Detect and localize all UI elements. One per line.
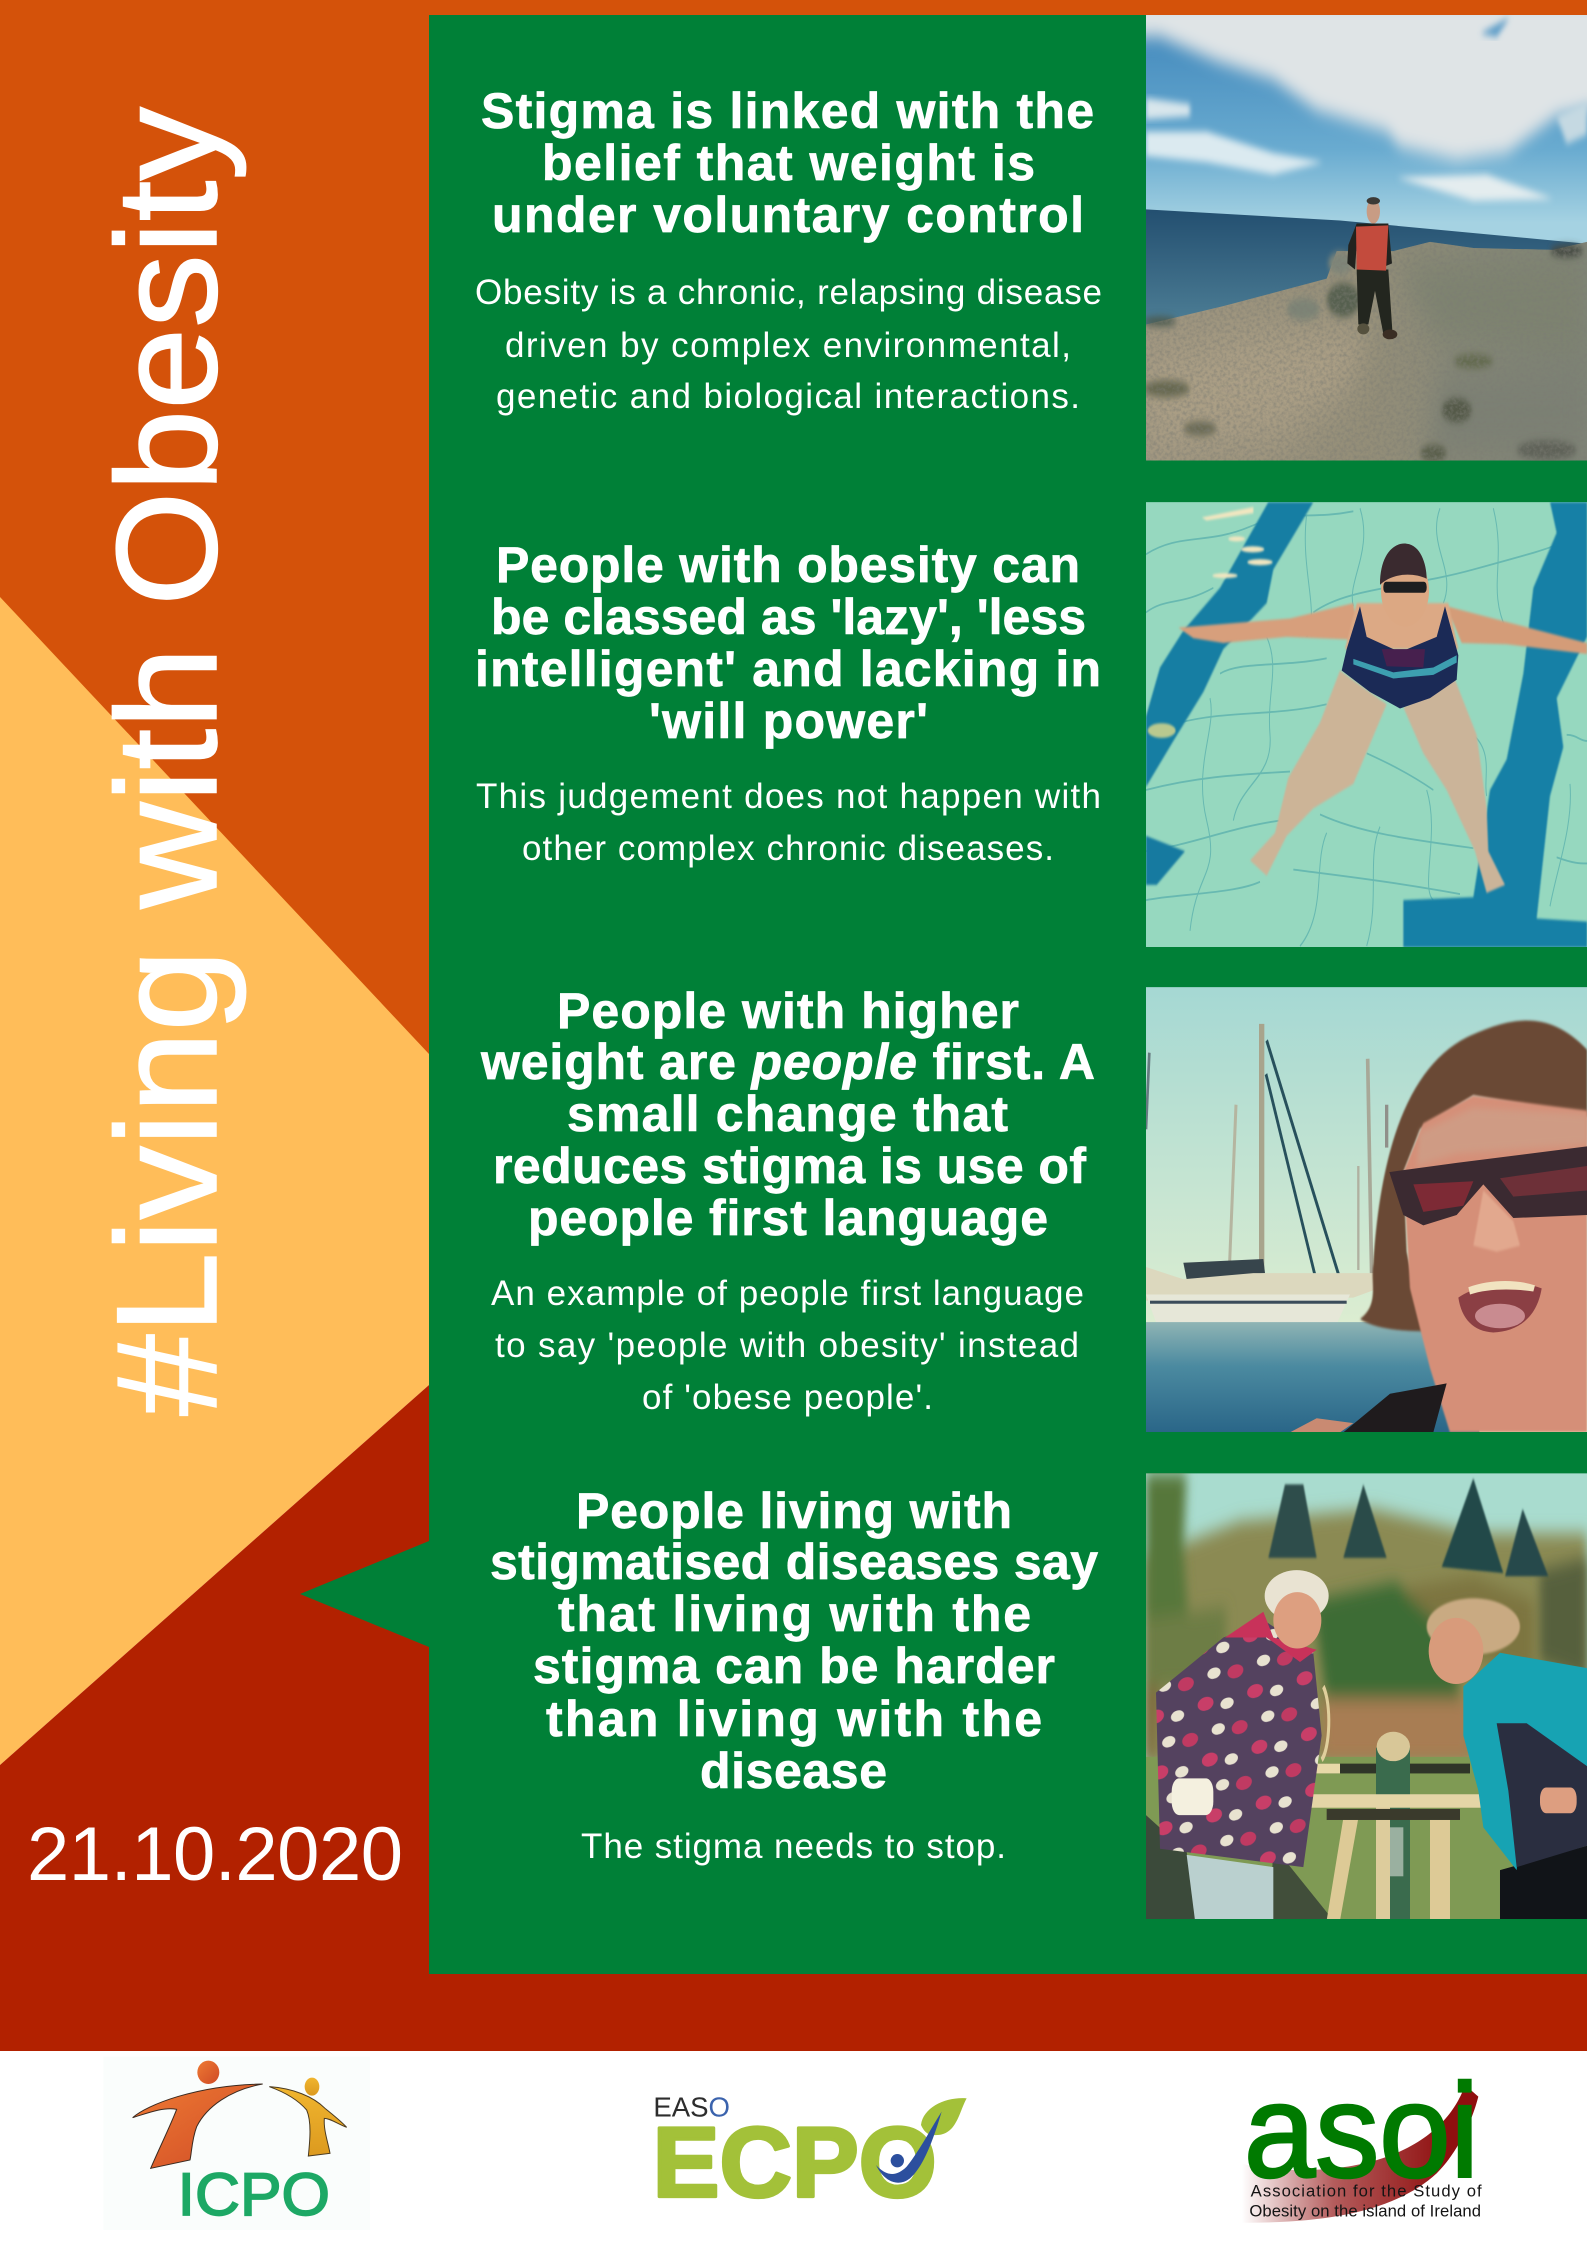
body 1: Obesity is a chronic, relapsing disease [475,273,1102,312]
photo: selfie with sailing boats [1146,987,1587,1432]
photo: woman floating in a swimming pool [1146,502,1587,949]
logo text: asoi: asoi [1244,2057,1479,2206]
footer: white logo strip [0,2051,1587,2245]
heading 4: disease [700,1743,887,1799]
body 1: genetic and biological interactions. [496,377,1080,416]
logo text: ECPO: ECPO [653,2107,937,2218]
logo subtitle [1249,2182,1482,2221]
logo: EASO ECPO [653,2092,967,2218]
text block 4 [490,1483,1098,1866]
heading 4: that living with the [558,1586,1031,1642]
body 2: This judgement does not happen with [476,777,1101,816]
heading 3: reduces stigma is use of [493,1138,1086,1194]
background: dark red section [0,1385,1587,2051]
text block 2 [475,537,1101,868]
icon: leaf [921,2098,967,2135]
title: rotated hashtag: #Living with Obesity [88,106,247,1416]
heading 4: stigma can be harder [533,1638,1055,1694]
body 2 [476,777,1101,868]
heading 3 [480,983,1095,1246]
logo text: EASO: EASO [653,2092,730,2123]
heading 3: people first language [528,1190,1048,1246]
logo: ICPO [103,2057,370,2230]
text block 3 [480,983,1095,1417]
heading 3: People with higher [557,983,1019,1039]
heading 1: belief that weight is [542,135,1035,191]
body 2: other complex chronic diseases. [522,829,1054,868]
photo: man on a coastal cliff [1133,0,1587,465]
heading 1 [481,83,1094,243]
body 3: to say 'people with obesity' instead [495,1326,1079,1365]
body 3: An example of people first language [491,1274,1084,1313]
icon: red swoosh [1242,2085,1478,2223]
heading 2: be classed as 'lazy', 'less [491,589,1086,645]
body 1: driven by complex environmental, [505,326,1071,365]
body 4: The stigma needs to stop. [581,1827,1006,1866]
icon: yellow figure [269,2078,347,2156]
heading 3: weight are people first. A [480,1034,1095,1090]
logo subtitle: Association for the Study of [1251,2182,1482,2201]
text block 1 [475,83,1102,416]
heading 2 [475,537,1101,749]
logo subtitle: Obesity on the island of Ireland [1249,2202,1481,2221]
body 3: of 'obese people'. [642,1378,933,1417]
icon: orange figure [133,2061,263,2168]
heading 1: Stigma is linked with the [481,83,1094,139]
heading 4: People living with [576,1483,1012,1539]
heading 3: small change that [567,1086,1008,1142]
photo: two women on outdoor gym equipment [1146,1473,1587,1920]
icon: blue person check mark [876,2112,942,2183]
body 1 [475,273,1102,416]
body 3 [491,1274,1084,1417]
panel: green content panel with pointer [300,15,1587,1974]
heading 4: stigmatised diseases say [490,1534,1098,1590]
logo text: ICPO: ICPO [178,2160,330,2228]
date: 21.10.2020 [27,1812,403,1897]
heading 2: 'will power' [649,693,928,749]
heading 4: than living with the [546,1691,1042,1747]
background: yellow diagonal section [0,597,429,1765]
background: orange section [0,0,1587,1100]
heading 4 [490,1483,1098,1799]
heading 2: intelligent' and lacking in [475,641,1101,697]
heading 2: People with obesity can [496,537,1080,593]
logo: ASOI [1242,2057,1482,2223]
heading 1: under voluntary control [492,187,1084,243]
